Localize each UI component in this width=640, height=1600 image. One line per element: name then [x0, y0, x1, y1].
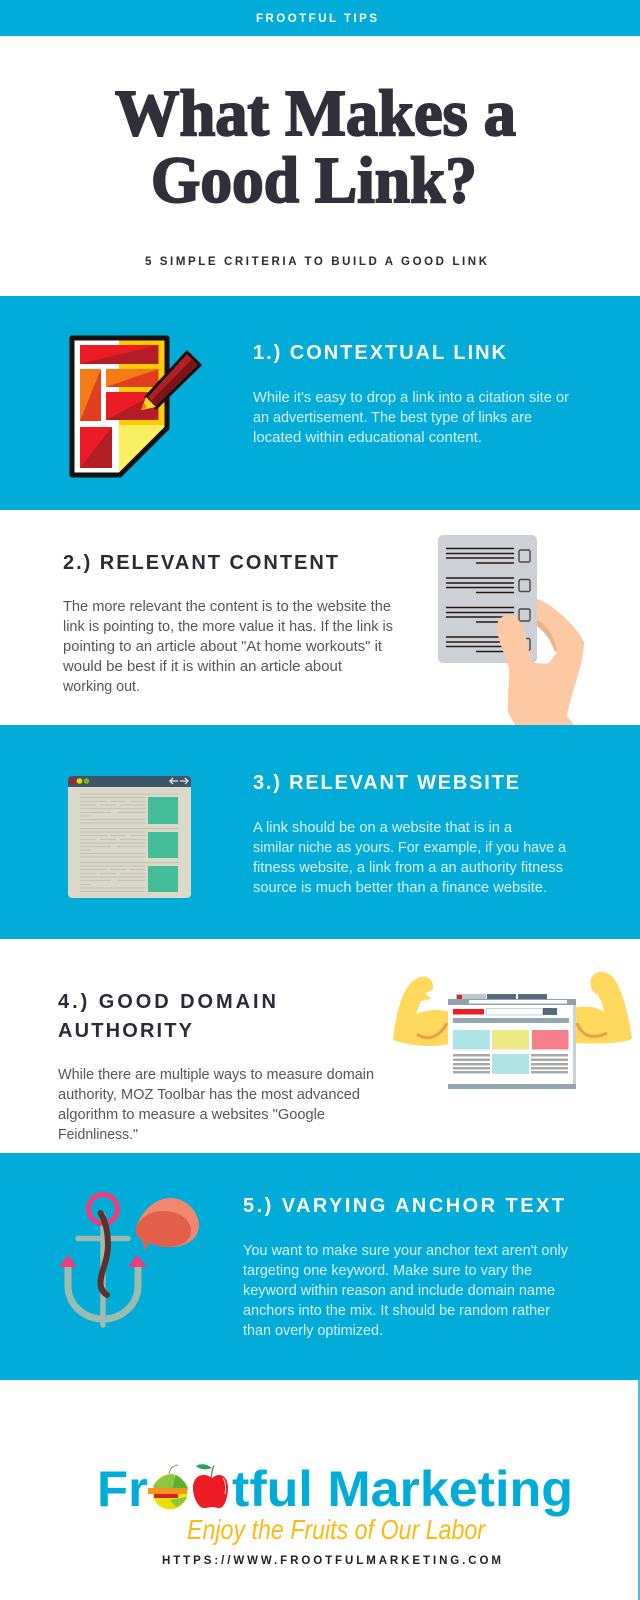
text block: While there are multiple ways to measure domain [58, 1067, 374, 1083]
logo wordmark [97, 1461, 573, 1517]
title [115, 77, 516, 217]
text block [62, 599, 393, 695]
text block: source is much better than a finance website. [253, 880, 547, 896]
text block [58, 1067, 374, 1143]
icon: flexing browser [393, 972, 632, 1089]
heading: 1.) CONTEXTUAL LINK [253, 342, 507, 364]
text block: than overly optimized. [243, 1323, 383, 1339]
title: What Makes a [115, 77, 516, 150]
icon: hand holding checklist [438, 535, 584, 725]
icon: anchor with rope [59, 1194, 147, 1325]
icon: browser window [68, 776, 191, 898]
text block [253, 390, 569, 446]
text block: similar niche as yours. For example, if you have a [253, 840, 567, 856]
title: Good Link? [151, 144, 477, 217]
text block [253, 820, 567, 896]
icon: apple [193, 1464, 228, 1508]
panel: contextual link [0, 296, 640, 510]
text block: anchors into the mix. It should be random rather [243, 1303, 550, 1319]
heading: 3.) RELEVANT WEBSITE [253, 772, 519, 794]
tagline: Enjoy the Fruits of Our Labor [187, 1514, 486, 1545]
logo wordmark: Fr [97, 1461, 148, 1517]
icon: document with pencil [72, 338, 200, 475]
text block: You want to make sure your anchor text aren't only [243, 1243, 569, 1259]
panel: relevant content [62, 535, 584, 725]
text block: located within educational content. [253, 430, 482, 446]
text block: While it's easy to drop a link into a citation site or [253, 390, 569, 406]
footer logo [97, 1461, 573, 1567]
logo wordmark: tful Marketing [232, 1461, 573, 1517]
text block [243, 1243, 569, 1339]
text block: working out. [62, 679, 140, 695]
top banner [0, 0, 640, 36]
text block: The more relevant the content is to the website the [63, 599, 391, 615]
panel: relevant website [0, 725, 640, 939]
text block: algorithm to measure a websites "Google [58, 1107, 325, 1123]
subtitle: 5 SIMPLE CRITERIA TO BUILD A GOOD LINK [145, 256, 488, 268]
text block: A link should be on a website that is in a [253, 820, 513, 836]
heading: 2.) RELEVANT CONTENT [63, 552, 338, 574]
heading: 5.) VARYING ANCHOR TEXT [243, 1195, 564, 1217]
website url: HTTPS://WWW.FROOTFULMARKETING.COM [162, 1555, 501, 1567]
heading [58, 991, 276, 1042]
text block: fitness website, a link from a an authority fitness [253, 860, 563, 876]
top banner: FROOTFUL TIPS [256, 13, 377, 25]
heading: 4.) GOOD DOMAIN [58, 991, 276, 1013]
text block: authority, MOZ Toolbar has the most advanced [58, 1087, 360, 1103]
text block: would be best if it is within an article about [62, 659, 342, 675]
icon: speech bubble [136, 1198, 199, 1251]
text block: link is pointing to, the more value it has. If the link is [63, 619, 393, 635]
panel: good domain authority [58, 972, 632, 1143]
heading: AUTHORITY [58, 1020, 193, 1042]
panel: varying anchor text [0, 1153, 640, 1380]
text block: targeting one keyword. Make sure to vary the [243, 1263, 532, 1279]
text block: pointing to an article about "At home workouts" it [63, 639, 382, 655]
text block: keyword within reason and include domain name [243, 1283, 555, 1299]
text block: an advertisement. The best type of links are [253, 410, 532, 426]
text block: Feidnliness." [58, 1127, 138, 1143]
icon: sliced citrus [148, 1465, 188, 1510]
